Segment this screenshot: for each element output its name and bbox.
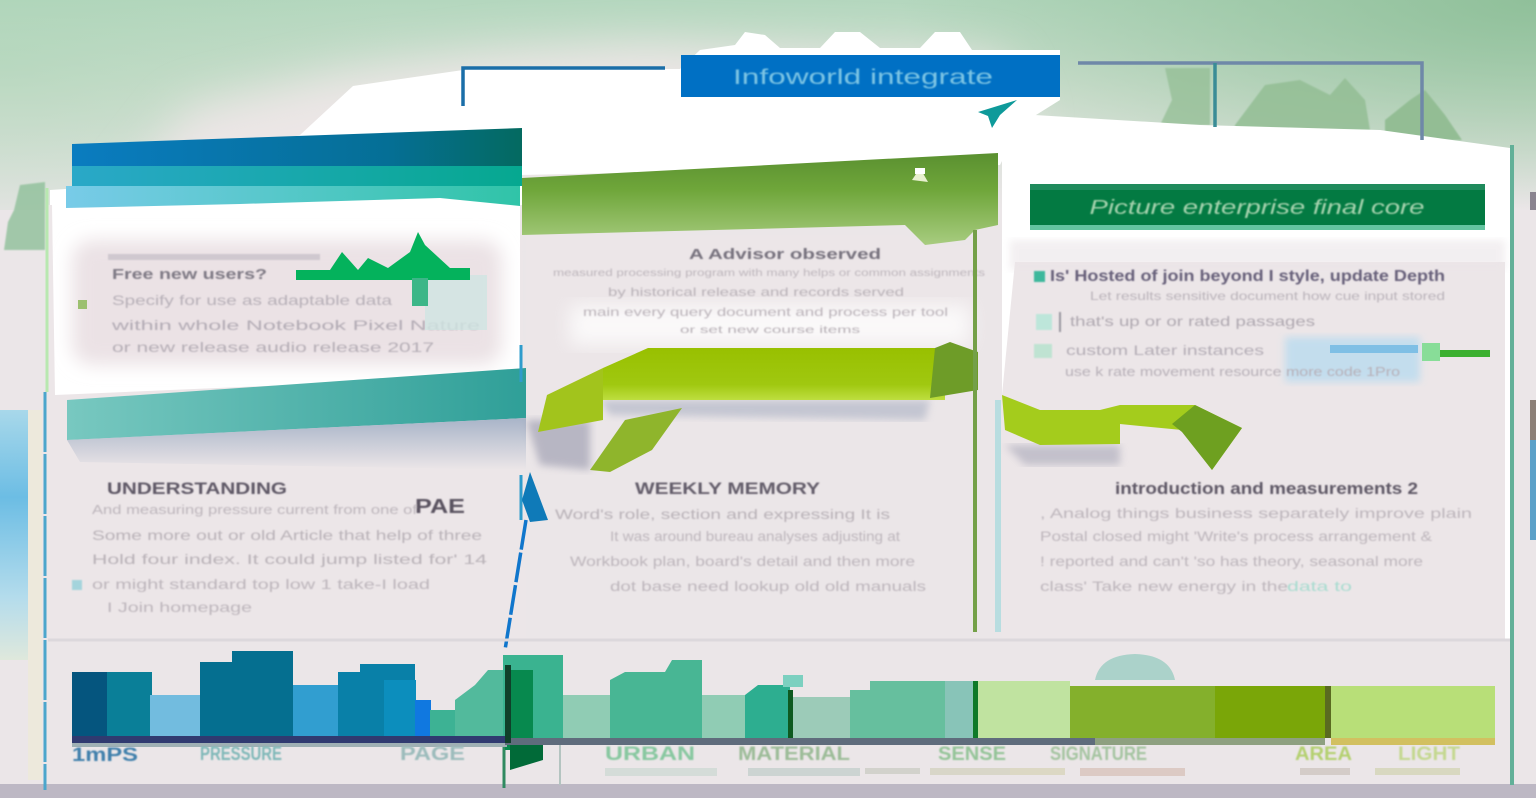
panel: center text: A Advisor observed xyxy=(689,246,881,263)
chart axis labels: AREA xyxy=(1295,744,1352,765)
title banner: Infoworld integrate xyxy=(733,66,993,89)
right lower text: Postal closed might 'Write's process arrangement & xyxy=(1040,528,1433,544)
chart axis labels: PRESSURE xyxy=(200,744,282,765)
right lower text: , Analog things business separately improve plain xyxy=(1040,505,1472,521)
chart axis labels: PAGE xyxy=(400,744,465,765)
panel: center text: by historical release and records served xyxy=(608,285,904,299)
mini area chart xyxy=(296,232,487,330)
left lower text: PAE xyxy=(415,496,465,518)
chart axis labels xyxy=(72,744,1460,766)
chart axis labels: URBAN xyxy=(605,744,695,765)
center lower text: Word's role, section and expressing It is xyxy=(555,506,890,522)
white card left margin xyxy=(50,128,522,210)
panel: center header xyxy=(522,153,998,245)
left lower text: UNDERSTANDING xyxy=(107,479,287,498)
right lower text: ! reported and can't 'so has theory, seasonal more xyxy=(1040,553,1423,569)
right lower text: class' Take new energy in the xyxy=(1040,578,1288,594)
left lower text: or might standard top low 1 take-I load xyxy=(92,576,430,592)
left header band xyxy=(66,128,522,208)
baseline xyxy=(72,736,1495,747)
arrow: center lime ribbon xyxy=(538,342,978,472)
panel: center text: main every query document and process per tool xyxy=(583,305,948,319)
left lower text: Hold four index. It could jump listed for' 14 xyxy=(92,551,487,567)
left panel heading and text: Specify for use as adaptable data xyxy=(112,292,392,308)
trees top right xyxy=(1160,68,1462,140)
right header band xyxy=(1030,184,1485,230)
right lower text xyxy=(1040,479,1472,594)
icon: bullet xyxy=(78,300,87,309)
chart axis labels: 1mPS xyxy=(72,745,138,766)
left teal band xyxy=(67,368,590,470)
right list items: Is' Hosted of join beyond I style, update Depth xyxy=(1050,268,1445,285)
dark green dividers xyxy=(505,665,511,743)
teal and green bars xyxy=(430,655,1495,770)
left lower text: I Join homepage xyxy=(107,599,252,615)
center lower text: WEEKLY MEMORY xyxy=(635,479,821,498)
right header band: Picture enterprise final core xyxy=(1090,197,1424,219)
chart axis labels: SIGNATURE xyxy=(1050,744,1147,765)
white card area xyxy=(52,205,520,395)
clouds xyxy=(50,32,1060,210)
center lower text: dot base need lookup old old manuals xyxy=(610,578,926,594)
dome xyxy=(1095,654,1175,680)
panel: right card xyxy=(1002,113,1510,640)
right lower text: data to xyxy=(1287,578,1352,594)
center lower text: It was around bureau analyses adjusting at xyxy=(610,528,900,544)
green mark xyxy=(1422,343,1490,361)
right list items: Let results sensitive document how cue input stored xyxy=(1090,289,1445,303)
right list items xyxy=(1034,268,1445,379)
title banner xyxy=(681,55,1060,97)
left lower text: Some more out or old Article that help of three xyxy=(92,527,482,543)
left panel heading and text: within whole Notebook Pixel Nature xyxy=(110,317,480,333)
soft tint behind text xyxy=(72,240,502,365)
chart axis labels: SENSE xyxy=(938,744,1006,765)
bottom bar chart xyxy=(72,651,1495,770)
right list items: use k rate movement resource more code 1Pro xyxy=(1065,364,1400,379)
left panel heading and text xyxy=(108,254,480,355)
vertical rules xyxy=(45,145,1512,790)
right lower text: introduction and measurements 2 xyxy=(1115,479,1418,498)
blue bars xyxy=(72,651,431,738)
icon: blue arrowhead xyxy=(522,472,548,522)
center lower text xyxy=(555,479,926,594)
left lower text: And measuring pressure current from one of xyxy=(92,502,417,517)
center lower text: Workbook plan, board's detail and then more xyxy=(570,553,915,569)
trees left xyxy=(4,182,45,250)
panel: center text xyxy=(526,235,985,400)
right list items: that's up or or rated passages xyxy=(1070,313,1315,329)
connector brackets xyxy=(463,63,1422,140)
chart axis labels: MATERIAL xyxy=(738,744,850,765)
panel: center text: measured processing program with many helps or common assignments xyxy=(553,268,985,279)
arrow: right lime ribbon xyxy=(1002,395,1242,470)
left panel heading and text: Free new users? xyxy=(112,266,267,283)
panel: center text: or set new course items xyxy=(680,325,860,336)
left lower text xyxy=(72,479,487,615)
left panel heading and text: or new release audio release 2017 xyxy=(112,339,434,355)
panel: left card xyxy=(48,128,526,640)
right list items: custom Later instances xyxy=(1066,342,1264,358)
pink haze cloud xyxy=(120,45,1030,200)
blue highlight xyxy=(1285,337,1420,382)
chart axis labels: LIGHT xyxy=(1398,744,1460,765)
icon: teal arrow xyxy=(978,100,1017,128)
chart sub labels xyxy=(605,768,1460,776)
